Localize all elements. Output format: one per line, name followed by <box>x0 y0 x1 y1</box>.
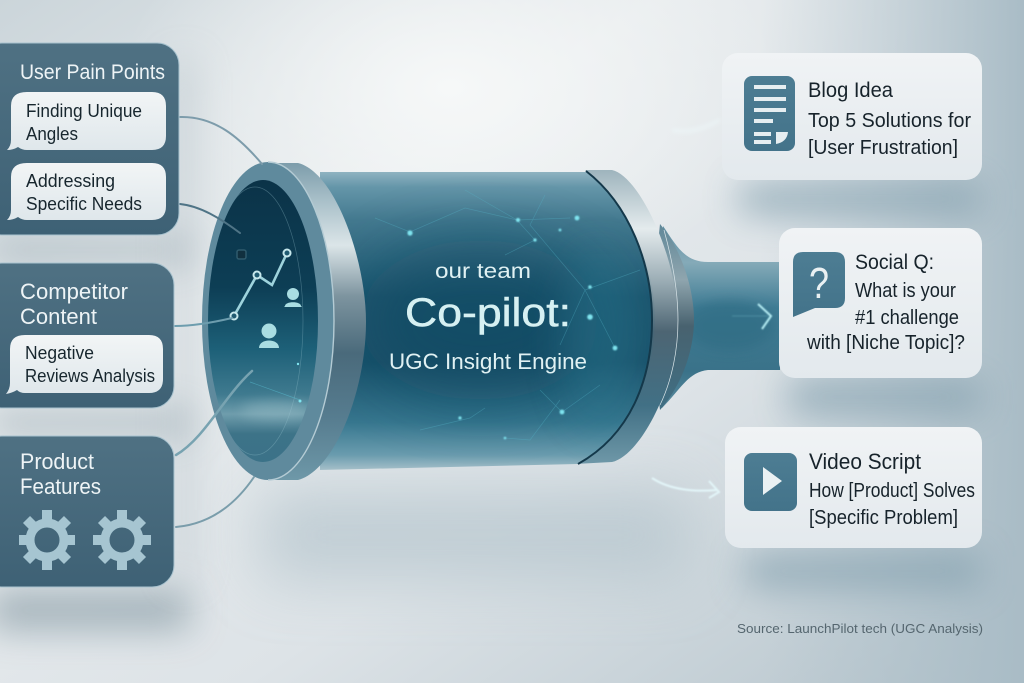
bubble: addressing specific needs: Addressing <box>26 171 115 191</box>
network nodes <box>407 216 617 439</box>
text: #1 challenge <box>855 307 959 329</box>
heading: Content <box>20 304 97 329</box>
bubble: finding unique angles <box>7 92 166 150</box>
bubble: negative reviews analysis <box>6 335 163 394</box>
heading: Competitor <box>20 279 128 304</box>
arrow inside neck <box>732 304 771 329</box>
engine title: our team <box>435 260 531 283</box>
left ring face <box>202 162 334 480</box>
connector lines <box>175 117 262 527</box>
bubble: finding unique angles: Angles <box>26 124 78 144</box>
text: Video Script <box>809 449 921 474</box>
icon: person small <box>284 288 302 307</box>
left ring band <box>268 163 366 480</box>
engine title: Co-pilot: <box>405 291 571 335</box>
card: blog idea <box>722 53 982 180</box>
heading: Product <box>20 449 94 474</box>
icon: gear left <box>19 510 75 570</box>
dark seam on the right of body <box>578 171 652 464</box>
panel: product features <box>0 436 174 587</box>
card: video script <box>725 427 982 548</box>
bubble: addressing specific needs <box>7 163 166 220</box>
text: Top 5 Solutions for <box>808 110 971 132</box>
engine title: UGC Insight Engine <box>389 349 587 374</box>
neck <box>662 226 780 408</box>
text: What is your <box>855 280 956 302</box>
panel: competitor content <box>0 263 174 408</box>
flange <box>650 224 694 410</box>
bubble: negative reviews analysis: Reviews Analysis <box>25 366 155 386</box>
bubble: negative reviews analysis: Negative <box>25 343 94 363</box>
arrow: to video card <box>652 478 719 498</box>
icon: question bubble: ? <box>809 259 829 308</box>
right ring <box>575 170 678 464</box>
cylinder body <box>320 172 652 470</box>
text: with [Niche Topic]? <box>806 332 965 354</box>
source note: Source: LaunchPilot tech (UGC Analysis) <box>737 621 983 636</box>
icon: gear right <box>93 510 151 570</box>
arrow: to blog card <box>672 120 720 131</box>
engine title <box>389 260 587 374</box>
card: social question <box>779 228 982 378</box>
text: [User Frustration] <box>808 137 958 159</box>
text: Social Q: <box>855 251 934 274</box>
icon: person large <box>259 324 279 348</box>
icon: play <box>744 453 797 511</box>
text: [Specific Problem] <box>809 507 958 529</box>
heading: User Pain Points <box>20 61 165 84</box>
network lines <box>375 190 640 440</box>
icon: line chart <box>230 250 290 320</box>
text: How [Product] Solves <box>809 480 975 502</box>
icon: question bubble <box>793 252 845 317</box>
bubble: finding unique angles: Finding Unique <box>26 101 142 121</box>
panel: user pain points <box>0 43 179 235</box>
bubble: addressing specific needs: Specific Needs <box>26 194 142 214</box>
funnel engine <box>202 162 780 480</box>
icon: document <box>744 76 795 151</box>
text: Blog Idea <box>808 79 893 102</box>
opening <box>208 180 318 462</box>
heading: Features <box>20 474 101 499</box>
